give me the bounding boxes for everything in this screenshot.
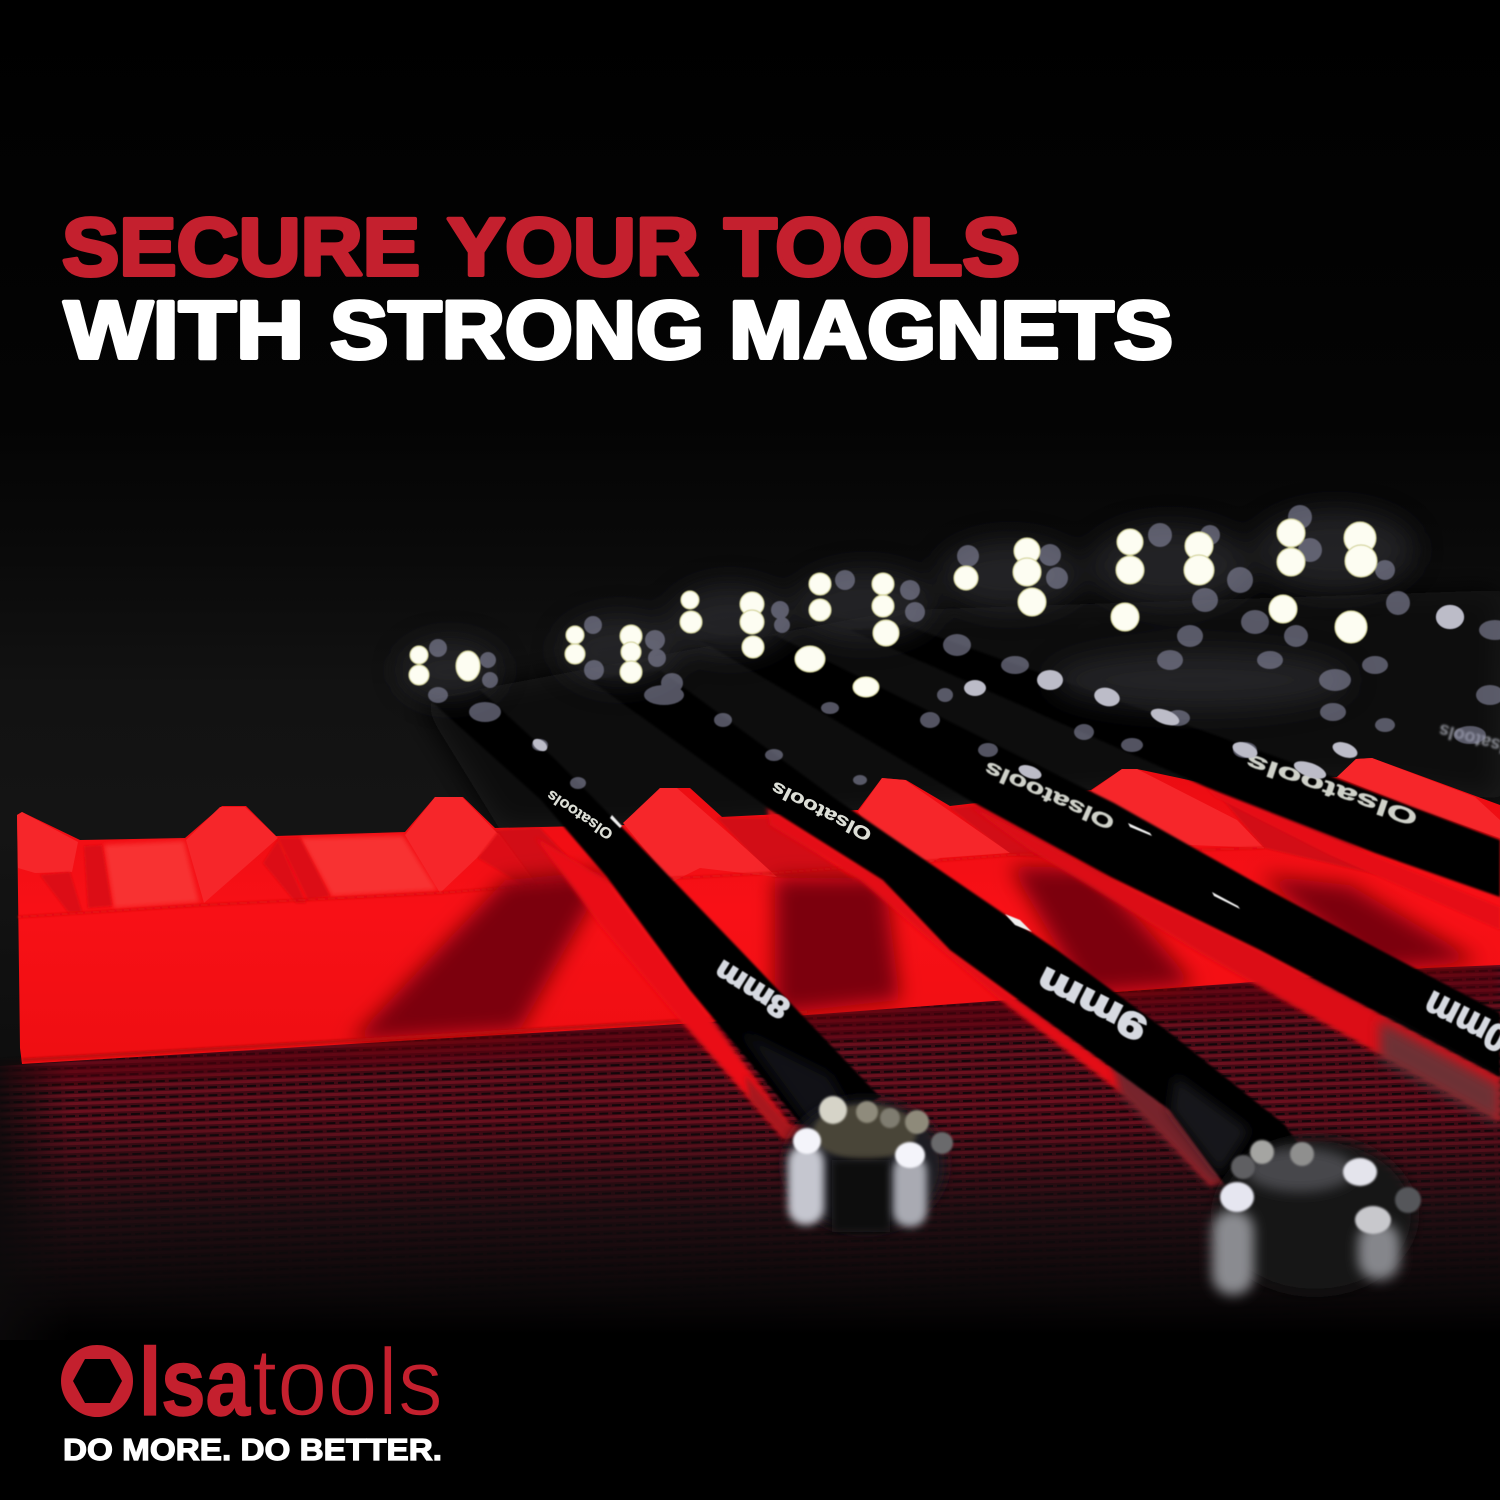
head 2 left bar [1212,1210,1254,1295]
headline line 1 [62,202,1020,293]
head 1 glints [793,1096,953,1168]
wrench 4 red reflection [1206,788,1500,930]
glints on wrench edges [610,815,1240,932]
headline line 1: SECURE [62,202,420,293]
wrench 3 red reflection [965,803,1500,1122]
red reflective weave on fabric under the rail [0,962,1500,1341]
head 1 right bar [893,1155,927,1227]
wrench 3 [700,635,1500,1125]
wrench 1 shaft [430,690,880,1130]
wrench 4 logo text: Olsatools [1242,749,1421,831]
brand logo [61,1329,443,1467]
head 2 body [1215,1137,1415,1293]
wrench 3 logo text: Olsatools [981,756,1118,834]
bright bokeh highlights [409,519,1377,697]
rail darker valleys behind wrenches [493,782,1400,882]
head 2 glints [1220,1140,1421,1234]
magnetic rail [17,758,1500,1064]
headline line 2 [64,285,1173,376]
head 1 body [785,1099,945,1231]
cast shadows on the rail [350,866,1480,1042]
dim bokeh highlights [428,505,1500,789]
wrench 2 shaft [590,670,1310,1185]
wrench 1 size mark: 8mm [709,954,796,1025]
wrench 4 shaft [850,625,1500,897]
head 2 right bar [1358,1222,1400,1280]
out-of-focus head haze [400,510,1415,710]
wrench 3 shaft [700,635,1500,1077]
rail tooth faces [17,758,1500,903]
headline [62,202,1173,376]
icon: hexagon O [61,1345,133,1417]
rail valley floors [104,836,437,908]
semi-bright bokeh glints on shafts [531,605,1464,782]
wrench 2 reflection haze [1110,1050,1232,1186]
rail tooth shaded sides [40,832,537,912]
wrench 1 logo text: Olsatools [544,786,616,843]
dark far end of the wrenches behind the rail [420,590,1500,830]
front wrench head 1 [785,1096,953,1232]
rail silhouette [17,758,1500,1064]
tagline: DO MORE. DO BETTER. [63,1432,442,1467]
wrench 4 [850,625,1500,930]
wordmark bold part: lsa [139,1329,251,1436]
wrench 2 logo text: Olsatools [768,777,875,845]
wrench 1 front haze [740,1030,850,1125]
wrench 1 [430,690,880,1140]
wrench 3 grey haze on reflection [1380,1020,1500,1125]
headline line 1: TOOLS [724,202,1020,293]
wrench 1 red reflection [535,837,805,1140]
wrench 2 [590,670,1310,1186]
wrench 1 reflection fade [745,1075,805,1140]
wrench 2 front haze [1170,1075,1250,1175]
head 2 ring glow [1245,1148,1355,1192]
rail front-face top edge [18,848,1264,917]
wrench 2 red reflection [767,807,1230,1185]
headline line 2: MAGNETS [729,285,1173,376]
head 1 centre dark [832,1160,890,1232]
logo and size text on far wrenches [981,720,1500,1069]
headline line 1: YOUR [447,202,699,293]
rail bottom lip [22,1012,807,1060]
head 1 left bar [788,1145,824,1225]
head 1 inner ring [813,1104,917,1160]
front wrench head 2 [1212,1137,1421,1295]
headline line 2: STRONG [330,285,704,376]
headline line 2: WITH [64,285,304,376]
wordmark light part: tools [252,1329,443,1436]
wrench 2 size mark: 9mm [1030,959,1154,1049]
